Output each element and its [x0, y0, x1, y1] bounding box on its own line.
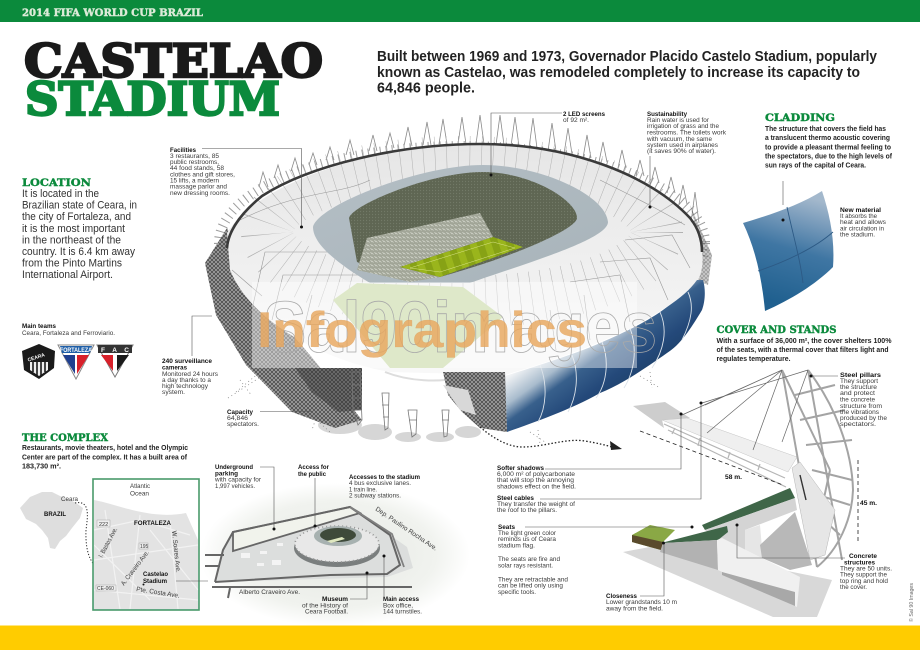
the complex block: Restaurants, movie theaters, hotel and the Olympic [22, 443, 188, 452]
cover section diagram: 45 m. [860, 500, 877, 507]
callout: concrete structures: top ring and hold [840, 578, 888, 585]
callout: museum: of the History of [302, 602, 348, 610]
header bar: 2014 FIFA WORLD CUP BRAZIL [22, 8, 203, 19]
intro text: 64,846 people. [377, 80, 475, 96]
dotted path arrow [480, 427, 622, 450]
inner grey ring [313, 165, 608, 283]
watermark: Infographics [257, 302, 587, 358]
callout: new material: air circulation in [840, 226, 884, 232]
callout: sustainability: irrigation of grass and the [647, 123, 719, 130]
callout: seats: solar rays resistant. [498, 562, 553, 570]
callout: accesses to the stadium: 4 bus exclusive lanes. [349, 480, 411, 487]
callout: steel cables: Steel cables [497, 495, 534, 502]
callout: new material: It absorbs the [840, 213, 877, 220]
plaza squares [241, 543, 283, 566]
callout: seats: The light green color [498, 530, 557, 537]
title: STADIUM [25, 72, 280, 126]
dark rim [227, 144, 702, 252]
callout: steel cables [497, 402, 702, 514]
facade [505, 280, 705, 432]
concrete rear block [745, 525, 763, 560]
white roof [662, 418, 797, 472]
map: Fortaleza: FORTALEZA [134, 520, 171, 527]
cladding block: a translucent thermo acoustic covering [765, 133, 890, 142]
location block: country. It is 6.4 km away [22, 246, 135, 258]
title [24, 34, 323, 126]
roof [227, 144, 703, 375]
location block: LOCATION [22, 178, 91, 189]
callout: steel pillars: produced by the [840, 415, 887, 422]
dimension 58 m [640, 431, 783, 485]
map: Fortaleza: Ocean [130, 490, 149, 498]
callout: seats: specific tools. [498, 589, 536, 596]
callout: surveillance cameras: system. [162, 389, 185, 396]
callout: underground parking [214, 464, 276, 530]
callout: concrete structures: the cover. [840, 584, 867, 591]
callout: capacity: 64,846 [227, 415, 248, 422]
cover and stands block [716, 325, 892, 363]
callout: steel pillars: structure from [840, 403, 883, 410]
cladding block [765, 113, 893, 170]
title: CASTELAO [24, 34, 323, 88]
cover and stands block: of the seats, with a thermal cover that filters light and [716, 345, 888, 354]
site ground [215, 507, 413, 582]
callout: steel pillars: Steel pillars [840, 372, 881, 379]
callout: seats: reminds us of Ceara [498, 536, 556, 543]
cover and stands block: regulates temperature. [716, 354, 790, 363]
map: Fortaleza: CE-060 [97, 586, 114, 592]
callout: softer shadows: that will stop the annoying [497, 477, 574, 484]
callout: underground parking: 1,997 vehicles. [215, 483, 255, 490]
complex aerial view: Alberto Craveiro Ave. [239, 589, 300, 596]
cover section diagram: 58 m. [725, 474, 742, 481]
the complex block: Center are part of the complex. It has a built area of [22, 452, 188, 462]
callout: closeness: away from the field. [606, 606, 663, 612]
left truss mesh [205, 228, 362, 428]
cladding block: the spectators, due to the high levels of [765, 152, 893, 160]
intro text: known as Castelao, was remodeled completely to increase its capacity to [377, 65, 860, 81]
callout: concrete structures: They are 50 units. [840, 566, 892, 572]
callout: facilities: public restrooms, [170, 159, 219, 166]
map: Brazil: Ceara [61, 496, 78, 503]
cover and stands block: With a surface of 36,000 m², the cover shelters 100% [716, 336, 892, 345]
intro text [377, 49, 877, 96]
parking lot [233, 507, 360, 551]
callout: access for the public [298, 464, 329, 528]
cover and stands block: COVER AND STANDS [716, 325, 836, 336]
location block: in the northeast of the [22, 234, 121, 246]
callout: seats: The seats are fire and [498, 556, 560, 563]
map: Fortaleza: 195 [140, 544, 149, 550]
cutaway section right [443, 372, 507, 432]
callout: underground parking: Underground [215, 464, 253, 471]
callout: steel cables: They transfer the weight of [497, 501, 575, 508]
callout: new material: the stadium. [840, 232, 875, 238]
callout: underground parking: parking [215, 470, 238, 478]
callout: seats: stadium flag. [498, 542, 535, 550]
callout: seats: They are retractable and [498, 576, 568, 584]
cladding block: CLADDING [765, 113, 835, 124]
map: Fortaleza: 222 [99, 522, 108, 528]
main teams [22, 323, 133, 379]
main teams: Main teams [22, 323, 56, 330]
callout: LED screens: of 92 m². [563, 117, 589, 124]
lower tier seats [665, 526, 728, 543]
map: Fortaleza [93, 479, 208, 610]
callout: new material: heat and allows [840, 219, 887, 226]
complex aerial view [200, 483, 470, 627]
callout: softer shadows: 6,000 m² of polycarbonate [497, 471, 575, 478]
right truss mesh [690, 205, 712, 285]
badge: FAC: F A C [101, 347, 129, 354]
callout: steel pillars: the vibrations [840, 409, 880, 416]
callout: main access [382, 554, 422, 616]
callout: sustainability: with vacuum, the same [646, 136, 712, 143]
roof ribs [267, 162, 657, 302]
callout: facilities: new dressing rooms. [170, 190, 230, 197]
callout: closeness [606, 542, 677, 612]
callout: concrete structures [736, 524, 892, 591]
map: Fortaleza: I. Bastos Ave. [98, 526, 119, 559]
callout: capacity [227, 409, 312, 428]
cladding block: sun rays of the capital of Ceara. [765, 160, 866, 170]
callout: steel pillars: the concrete [840, 396, 875, 404]
ground debris shadow [318, 416, 481, 442]
callout: sustainability: restrooms. The toilets work [647, 130, 727, 136]
callout: facilities: 3 restaurants, 85 [170, 153, 219, 160]
cladding block: The structure that covers the field has [765, 124, 886, 133]
scattered dots [228, 372, 660, 444]
outer truss ring [219, 146, 705, 340]
callout: accesses to the stadium [349, 474, 420, 500]
translucent wall [792, 462, 835, 560]
callout: steel pillars [810, 372, 887, 428]
callout: main access: 144 turnstiles. [383, 608, 422, 616]
callout: surveillance cameras: high technology [162, 383, 209, 390]
bowl upper stands [349, 172, 577, 278]
callout: main access: Box office, [383, 602, 413, 610]
hanging trusses [352, 372, 449, 437]
mini stadium [294, 529, 380, 567]
callout: concrete structures: Concrete [849, 553, 877, 560]
footer bar [0, 626, 920, 650]
the complex block [22, 433, 188, 470]
callout: softer shadows [497, 412, 682, 490]
callout: softer shadows: shadows effect on the field. [497, 484, 576, 490]
badge: Fortaleza: FORTALEZA [60, 347, 92, 354]
map: Fortaleza: A. Craveiro Ave. [120, 549, 151, 587]
lower concrete [660, 540, 718, 570]
ground shadow [623, 545, 832, 617]
callout: new material: New material [840, 207, 881, 214]
cladding block: to provide a pleasant thermal feeling to [765, 142, 892, 152]
cover section diagram [623, 370, 877, 617]
location block: Brazilian state of Ceara, in [22, 200, 137, 212]
callout: surveillance cameras: cameras [162, 364, 187, 372]
location block: from the Pinto Martins [22, 258, 122, 270]
complex aerial view: Dep. Paulino Rocha Ave. [374, 506, 438, 553]
truss spikes around rim [259, 115, 699, 223]
location block [22, 178, 137, 281]
dimension 45 m [857, 460, 859, 542]
callout: LED screens: 2 LED screens [563, 111, 605, 118]
turf piece [632, 525, 675, 550]
callout: sustainability: (it saves 90% of water). [647, 148, 716, 155]
main truss pillars [782, 370, 853, 567]
callout: facilities: 44 food stands, 58 [170, 165, 224, 172]
cut-away pale pitch [333, 283, 503, 368]
concrete upper tier [702, 488, 795, 530]
callout: sustainability: Rain water is used for [647, 117, 710, 124]
callout: accesses to the stadium: 2 subway stations. [349, 492, 401, 500]
map: Fortaleza: Pte. Costa Ave. [136, 586, 180, 600]
callout: facilities: clothes and gift stores, [170, 172, 235, 178]
callout: accesses to the stadium: Accesses to the stadium [349, 474, 420, 481]
callout: museum: Museum [322, 596, 348, 603]
callout: seats [498, 524, 694, 596]
the complex block: THE COMPLEX [22, 433, 108, 444]
callout: sustainability [646, 111, 727, 208]
callout: main access: Main access [383, 596, 419, 603]
callout: concrete structures: structures [844, 560, 875, 566]
callout: facilities: massage parlor and [170, 184, 227, 190]
callout: facilities [170, 147, 303, 228]
cables [682, 370, 808, 450]
callout: sustainability: Sustainability [647, 111, 687, 118]
location block: it is the most important [22, 223, 125, 235]
map: Fortaleza: W. Soares Ave. [170, 530, 181, 573]
callout: closeness: Lower grandstands 10 m [606, 599, 677, 606]
callout: new material [840, 207, 887, 238]
main teams: Ceara, Fortaleza and Ferroviario. [22, 330, 115, 337]
callout: concrete structures: They support the [840, 572, 887, 578]
callout: steel pillars: They support [840, 378, 878, 385]
callout: surveillance cameras: Monitored 24 hours [162, 371, 219, 378]
watermark: Sal90images [263, 288, 657, 368]
roof underside truss [664, 424, 786, 487]
location block: It is located in the [22, 188, 99, 200]
callout: museum [302, 572, 368, 616]
location block: the city of Fortaleza, and [22, 211, 131, 223]
map: Fortaleza: Atlantic [130, 483, 151, 490]
cladding panel [743, 181, 833, 311]
location block: International Airport. [22, 269, 113, 281]
bowl lower stands [357, 213, 493, 282]
map: Brazil: BRAZIL [44, 511, 66, 518]
site roads [205, 507, 412, 598]
callout: steel pillars: the structure [840, 384, 877, 391]
grey roof tip [633, 402, 690, 428]
callout: access for the public: the public [298, 471, 326, 478]
callout: steel cables: the roof to the pillars. [497, 507, 557, 514]
map: Fortaleza: Castelao [143, 571, 168, 578]
callout: surveillance cameras: 240 surveillance [162, 358, 212, 365]
dotted locator arrow [75, 503, 118, 577]
the complex block: 183,730 m². [22, 462, 61, 470]
badge: Ceara: CEARA [27, 352, 46, 364]
pitch [400, 237, 523, 277]
callout: underground parking: with capacity for [214, 476, 262, 484]
callout: seats: Seats [498, 524, 515, 531]
callout: accesses to the stadium: 1 train line. [349, 486, 377, 494]
intro text: Built between 1969 and 1973, Governador Placido Castelo Stadium, popularly [377, 49, 877, 65]
callout: capacity: Capacity [227, 409, 253, 416]
credit: © Sal 90 Images [908, 582, 915, 622]
callout: access for the public: Access for [298, 464, 329, 471]
callout: museum: Ceara Football. [305, 608, 348, 616]
callout: surveillance cameras: a day thanks to a [162, 377, 211, 384]
callout: capacity: spectators. [227, 421, 259, 428]
callout: LED screens [490, 111, 605, 176]
callout: steel pillars: and protect [840, 390, 875, 397]
stadium illustration [205, 115, 712, 450]
header bar [0, 0, 920, 22]
cutaway section left [295, 368, 362, 412]
map: Brazil [20, 492, 83, 549]
map: Fortaleza: Stadium [143, 578, 167, 585]
callout: surveillance cameras [162, 316, 219, 396]
callout: softer shadows: Softer shadows [497, 465, 544, 472]
callout: seats: can be lifted only using [498, 582, 563, 590]
callout: steel pillars: spectators. [840, 421, 876, 428]
callout: facilities: 15 lifts, a modern [170, 178, 219, 184]
callout: sustainability: system used in airplanes [647, 142, 719, 149]
callout: facilities: Facilities [170, 147, 196, 154]
callout: closeness: Closeness [606, 593, 637, 600]
